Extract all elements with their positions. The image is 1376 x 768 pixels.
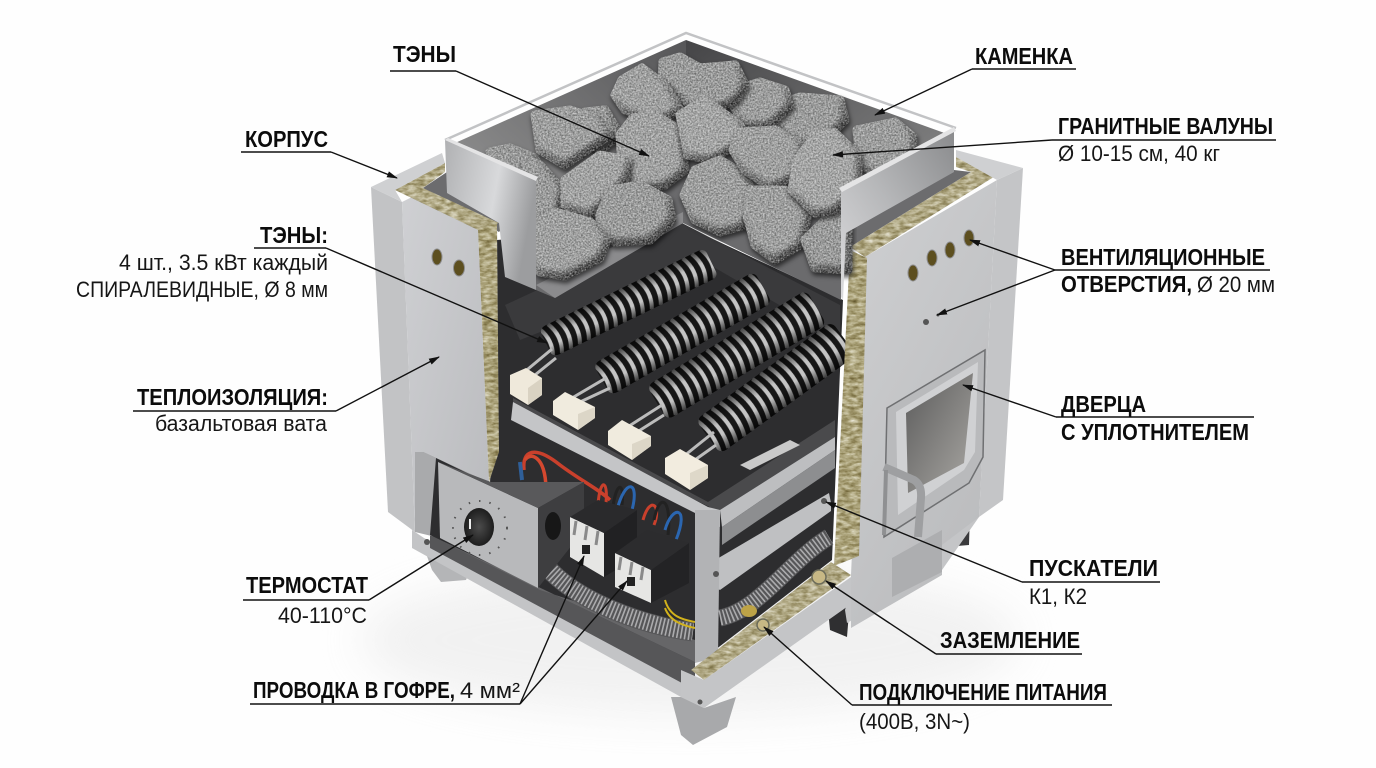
tray top rim	[445, 33, 956, 140]
left column	[371, 187, 415, 532]
left plate edge	[445, 138, 538, 181]
ceramic block 1	[510, 368, 542, 405]
label: ТЕПЛОИЗОЛЯЦИЯ: базальтовая вата	[155, 411, 328, 436]
vent holes left	[432, 249, 464, 276]
contactor wires	[598, 485, 657, 525]
boulder	[600, 185, 672, 242]
label: ТЕПЛОИЗОЛЯЦИЯ	[133, 357, 439, 436]
support bars	[740, 440, 800, 470]
label: ТЭНЫ specs: ТЭНЫ:	[260, 222, 328, 248]
label: ТЕРМОСТАТ: 40-110°C	[278, 603, 367, 628]
dial scale	[453, 501, 507, 555]
label: ПРОВОДКА В ГОФРЕ	[250, 556, 627, 704]
label: ЗАЗЕМЛЕНИЕ	[826, 581, 1082, 654]
knob	[464, 508, 494, 546]
label: КАМЕНКА	[875, 43, 1076, 115]
conduit left	[546, 566, 693, 632]
boulder	[857, 122, 913, 177]
front shelf rail	[511, 402, 720, 527]
stone tray	[445, 33, 956, 300]
coil 1	[539, 248, 718, 357]
brass gland	[741, 605, 757, 617]
boulder	[525, 160, 562, 222]
label: ТЭНЫ top	[390, 41, 649, 156]
coil 3	[647, 290, 827, 420]
boulder	[585, 110, 620, 150]
front post	[695, 510, 720, 663]
red wire	[524, 452, 610, 500]
knob pointer	[469, 519, 471, 529]
label: ТЕРМОСТАТ: ТЕРМОСТАТ	[246, 572, 368, 598]
contactor K2	[615, 530, 689, 603]
label: ГРАНИТНЫЕ ВАЛУНЫ	[833, 113, 1276, 166]
right wall panel	[851, 180, 997, 628]
terminal rods	[522, 349, 716, 462]
label: ГРАНИТНЫЕ ВАЛУНЫ: ГРАНИТНЫЕ ВАЛУНЫ	[1058, 113, 1273, 139]
interior	[430, 225, 843, 662]
yellow wires	[665, 600, 695, 628]
boulder	[805, 205, 848, 270]
contactor K1	[570, 500, 637, 577]
left wall panel	[402, 197, 489, 532]
interior back walls	[505, 223, 840, 340]
cable gland	[545, 512, 561, 540]
base frame	[412, 522, 851, 708]
right lower bay	[710, 450, 835, 618]
conduit right ribs	[720, 537, 829, 618]
boulder	[680, 100, 745, 160]
box front	[438, 462, 538, 588]
label: ЗАЗЕМЛЕНИЕ: ЗАЗЕМЛЕНИЕ	[940, 627, 1080, 653]
insulation bottom	[691, 562, 851, 680]
label: ТЭНЫ specs: СПИРАЛЕВИДНЫЕ, Ø 8 мм	[76, 277, 328, 302]
label: ПОДКЛЮЧЕНИЕ ПИТАНИЯ: (400В, 3N~)	[859, 709, 970, 734]
front leg	[671, 697, 736, 745]
label: ДВЕРЦА: ДВЕРЦА	[1061, 391, 1146, 417]
insulation left top	[395, 163, 499, 230]
right plate edge	[839, 127, 956, 192]
label: ПУСКАТЕЛИ: ПУСКАТЕЛИ	[1029, 555, 1158, 581]
insulation right top	[850, 157, 997, 257]
right tray plate	[841, 130, 954, 300]
red wire short	[525, 456, 546, 488]
label: ТЭНЫ specs: 4 шт., 3.5 кВт каждый	[119, 250, 328, 275]
blue wires	[617, 487, 681, 540]
label: ТЭНЫ specs	[76, 222, 547, 343]
ceramic block 3	[608, 420, 651, 460]
label: ПРОВОДКА В ГОФРЕ: ПРОВОДКА В ГОФРЕ,	[253, 677, 455, 703]
boulder	[684, 160, 755, 232]
conduit right	[720, 537, 829, 618]
label: ГРАНИТНЫЕ ВАЛУНЫ: Ø 10-15 см, 40 кг	[1058, 141, 1220, 166]
insulation left vertical	[478, 222, 499, 482]
ceramic block 4	[665, 449, 708, 490]
tray gaps	[423, 170, 971, 247]
boulder	[532, 212, 607, 276]
heating elements	[510, 248, 856, 527]
label: ПРОВОДКА В ГОФРЕ: 4 мм²	[460, 678, 520, 703]
coil 2	[593, 271, 772, 396]
door glass	[906, 373, 973, 493]
right column	[979, 168, 1023, 517]
insulation right vertical	[834, 250, 867, 566]
boulder	[620, 115, 685, 188]
label: ТЕПЛОИЗОЛЯЦИЯ: ТЕПЛОИЗОЛЯЦИЯ:	[137, 384, 328, 410]
tray right inner wall	[686, 40, 950, 230]
label: ДВЕРЦА	[963, 385, 1254, 445]
top shelf upper bar	[722, 450, 835, 545]
label: ТЕРМОСТАТ	[243, 535, 473, 628]
vent holes right	[908, 230, 974, 281]
boulder	[535, 110, 610, 165]
label: ТЭНЫ top: ТЭНЫ	[393, 41, 456, 67]
thermostat box	[438, 462, 584, 588]
label: ВЕНТИЛЯЦИОННЫЕ ОТВЕРСТИЯ: Ø 20 мм	[1197, 272, 1275, 297]
label: ПУСКАТЕЛИ: К1, К2	[1029, 584, 1087, 609]
label: КОРПУС: КОРПУС	[245, 126, 328, 152]
floor shadow	[360, 565, 1020, 715]
label: КАМЕНКА: КАМЕНКА	[975, 43, 1073, 69]
door frame	[884, 350, 985, 537]
shelf below coils	[513, 398, 835, 512]
boulder	[615, 68, 680, 122]
corner strip right	[956, 150, 1023, 180]
box side	[538, 482, 584, 588]
terminals	[757, 570, 826, 631]
ceramic block 2	[553, 392, 595, 430]
label: ПОДКЛЮЧЕНИЕ ПИТАНИЯ: ПОДКЛЮЧЕНИЕ ПИТАНИЯ	[859, 679, 1107, 705]
door inner frame	[896, 362, 978, 515]
label: ДВЕРЦА: С УПЛОТНИТЕЛЕМ	[1061, 419, 1249, 445]
door	[884, 350, 985, 537]
corner strip left	[371, 153, 445, 202]
boulder	[733, 82, 790, 125]
label: ПУСКАТЕЛИ	[826, 502, 1160, 609]
black wires	[612, 487, 669, 535]
box top	[438, 462, 584, 508]
tray floor	[536, 170, 843, 300]
tray left inner wall	[455, 40, 686, 250]
tray underside lip	[536, 212, 683, 298]
wiring and electrical bay	[438, 452, 695, 632]
floor of lower bay	[440, 540, 695, 662]
label: ВЕНТИЛЯЦИОННЫЕ ОТВЕРСТИЯ: ОТВЕРСТИЯ,	[1061, 271, 1192, 297]
boulder	[747, 190, 808, 260]
label: ВЕНТИЛЯЦИОННЫЕ ОТВЕРСТИЯ: ВЕНТИЛЯЦИОННЫЕ	[1061, 244, 1265, 270]
label: ПОДКЛЮЧЕНИЕ ПИТАНИЯ	[764, 627, 1112, 734]
boulder	[490, 148, 545, 195]
label: ВЕНТИЛЯЦИОННЫЕ ОТВЕРСТИЯ	[937, 240, 1275, 315]
boulder	[662, 57, 745, 115]
door handle	[884, 467, 921, 537]
boulder	[792, 133, 858, 213]
door hinge bar	[884, 470, 886, 535]
boulder	[733, 130, 800, 187]
boulder	[775, 97, 845, 145]
right shelf rail	[720, 437, 835, 527]
back legs	[424, 510, 970, 637]
flat bar	[710, 493, 831, 590]
insulation	[395, 157, 997, 680]
granite boulders	[490, 57, 913, 276]
left tray plate	[445, 140, 536, 290]
boulder	[565, 155, 628, 215]
lower right recess	[892, 530, 942, 597]
coil 4	[696, 321, 856, 454]
sauna heater illustration	[371, 33, 1023, 745]
blue wire	[520, 462, 522, 480]
seam	[415, 452, 491, 538]
right body lower block	[845, 517, 979, 623]
small screws	[424, 314, 940, 704]
label: КОРПУС	[241, 126, 397, 178]
